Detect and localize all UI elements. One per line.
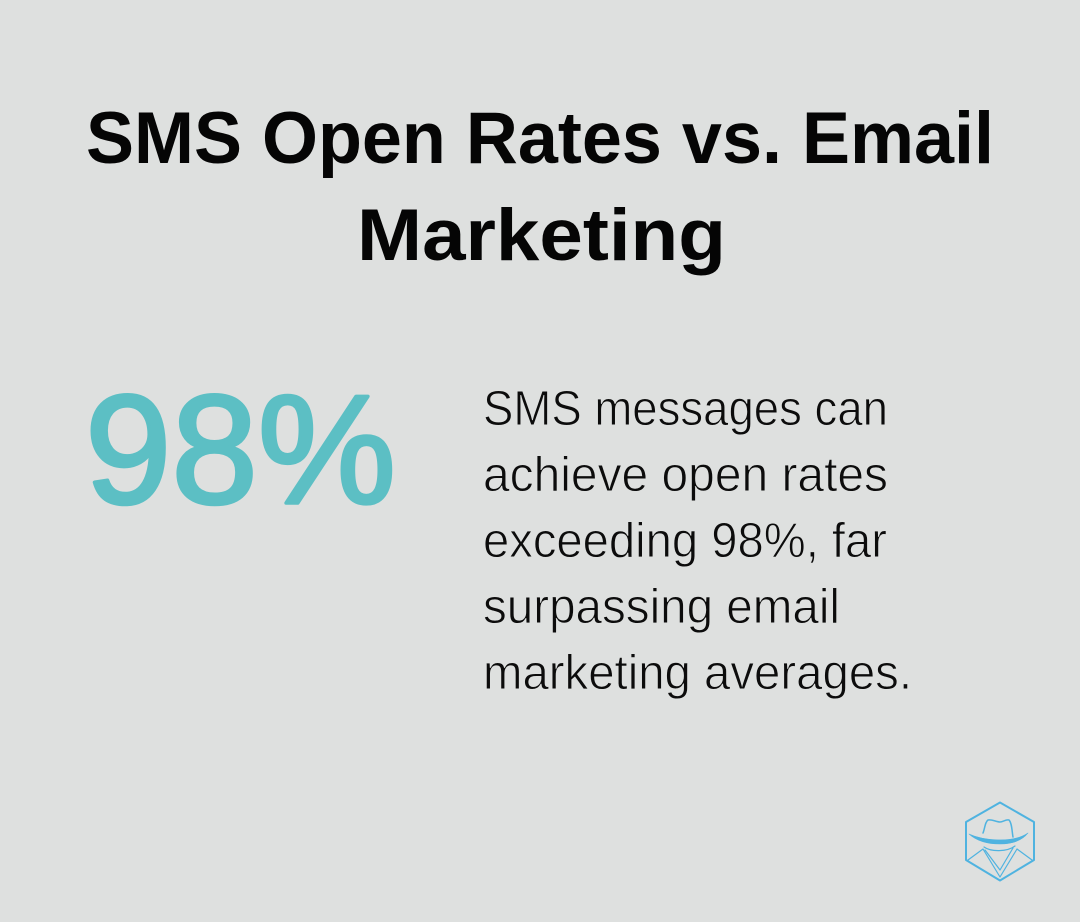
- icon: spy logo in hexagon: [966, 802, 1034, 880]
- description text: achieve open rates: [483, 448, 888, 502]
- description text: [483, 382, 912, 700]
- description text: SMS messages can: [483, 382, 888, 436]
- title: [86, 98, 994, 276]
- description text: exceeding 98%, far: [483, 514, 887, 568]
- big statistic: 98%: 98%: [85, 363, 396, 536]
- description text: marketing averages.: [483, 646, 912, 700]
- title: Marketing: [357, 195, 726, 276]
- title: SMS Open Rates vs. Email: [86, 98, 994, 179]
- description text: surpassing email: [483, 580, 840, 634]
